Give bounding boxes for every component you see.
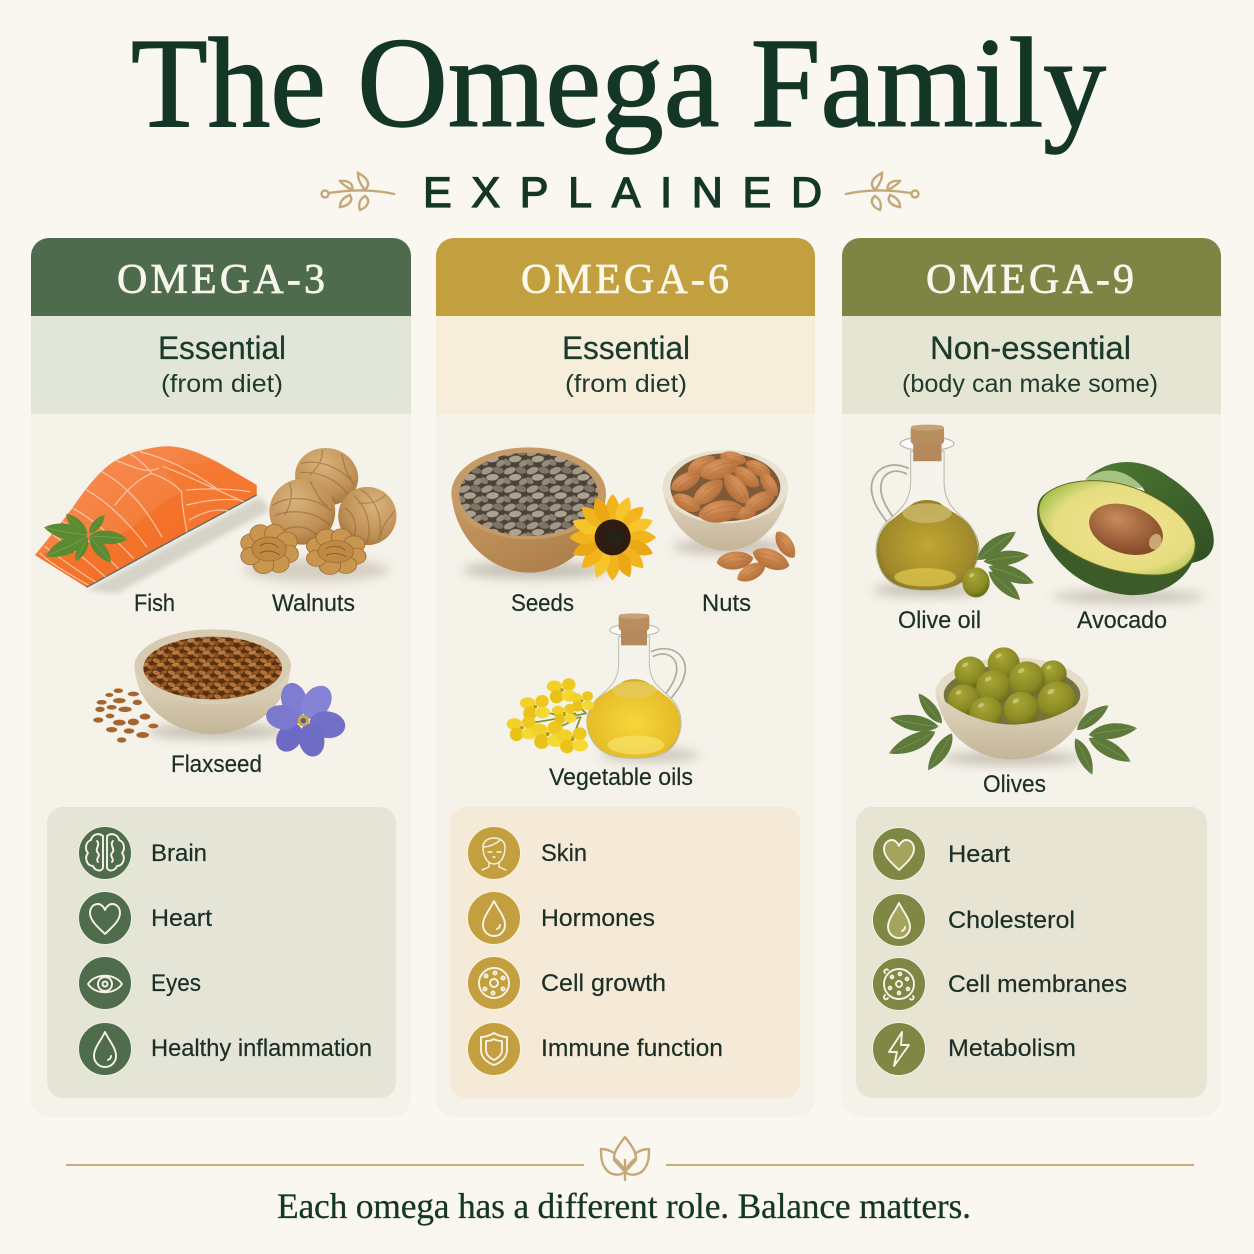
almonds in bowl [668, 449, 782, 525]
benefit: immune function [468, 1022, 723, 1076]
benefit: hormones [468, 892, 655, 944]
label: olive oil: Olive oil [898, 607, 981, 634]
essential band: Essential [158, 330, 286, 366]
fish: salmon fillet [35, 446, 270, 593]
non-essential band: (body can make some) [902, 370, 1158, 398]
benefit: immune function: Immune function [541, 1035, 723, 1062]
sunflower [569, 494, 656, 581]
benefit: healthy inflammation [78, 1022, 372, 1076]
omega-6 header [436, 238, 815, 316]
label: fish: Fish [134, 590, 175, 617]
panel: omega-9 [842, 238, 1221, 1117]
benefit: skin [468, 826, 587, 880]
label: olives: Olives [983, 771, 1046, 798]
non-essential band [842, 316, 1221, 414]
icon: footer leaf [601, 1137, 649, 1180]
omega-3 heading: OMEGA-3 [117, 257, 325, 303]
footer message: Each omega has a different role. Balance matters. [277, 1186, 971, 1226]
food illustrations: omega-9 [871, 425, 1214, 777]
benefit: heart: Heart [151, 905, 212, 932]
omega-3 header [31, 238, 411, 316]
essential band: Essential [562, 330, 690, 366]
benefits box: omega-6 [450, 807, 800, 1098]
omega-6 heading: OMEGA-6 [521, 257, 729, 303]
benefit: cholesterol: Cholesterol [948, 907, 1075, 934]
benefit: cell membranes [872, 958, 1127, 1010]
avocado [1037, 462, 1214, 603]
benefits box: omega-3 [47, 807, 396, 1098]
benefit: cell growth: Cell growth [541, 970, 666, 997]
essential band [31, 316, 411, 414]
benefits box: omega-9 [856, 807, 1207, 1098]
benefit: metabolism: Metabolism [948, 1035, 1076, 1062]
scattered flax seeds [93, 688, 158, 743]
panel: omega-3 [31, 238, 411, 1117]
benefit: cholesterol [872, 894, 1075, 946]
benefit: cell membranes: Cell membranes [948, 971, 1127, 998]
flax flower [264, 680, 347, 759]
benefit: healthy inflammation: Healthy inflammation [151, 1035, 372, 1062]
vegetable oil bottle [586, 613, 699, 762]
label: nuts: Nuts [702, 590, 751, 617]
benefit: eyes [78, 956, 201, 1010]
benefit: heart [78, 892, 212, 944]
omega-9 header [842, 238, 1221, 316]
herb garnish [42, 510, 128, 566]
olive sprig [962, 525, 1037, 605]
olive oil bottle [871, 425, 1037, 605]
nuts bowl [663, 449, 800, 586]
benefit: skin: Skin [541, 840, 587, 867]
loose almonds [716, 528, 800, 586]
seeds bowl [451, 447, 609, 579]
footer divider [66, 1137, 1194, 1180]
benefit: heart: Heart [948, 841, 1010, 868]
benefit: brain [78, 826, 207, 880]
food illustrations: omega-6 [451, 447, 800, 762]
subtitle: explained: EXPLAINED [423, 169, 822, 217]
rapeseed flowers [507, 678, 594, 753]
food illustrations: omega-3 [35, 442, 407, 759]
subtitle with laurels [322, 169, 918, 217]
benefit: hormones: Hormones [541, 905, 655, 932]
label: seeds: Seeds [511, 590, 574, 617]
walnuts [241, 442, 407, 582]
essential band: (from diet) [161, 370, 283, 398]
flaxseed bowl [134, 629, 291, 739]
benefit: cell growth [468, 956, 666, 1010]
benefit: metabolism [872, 1022, 1076, 1076]
omega-9 heading: OMEGA-9 [926, 257, 1134, 303]
label: flaxseed: Flaxseed [171, 751, 262, 778]
icon: right laurel [846, 173, 918, 210]
benefit: brain: Brain [151, 840, 207, 867]
essential band: (from diet) [565, 370, 687, 398]
title: The Omega Family [131, 12, 1106, 154]
label: avocado: Avocado [1077, 607, 1167, 634]
label: vegetable oils: Vegetable oils [549, 764, 693, 791]
avocado pit [1082, 495, 1170, 564]
olives bowl [886, 647, 1138, 777]
icon: left laurel [322, 173, 394, 210]
benefit: heart [872, 828, 1010, 880]
benefit: eyes: Eyes [151, 970, 201, 997]
essential band [436, 316, 815, 414]
label: walnuts: Walnuts [272, 590, 355, 617]
non-essential band: Non-essential [930, 330, 1131, 366]
panel: omega-6 [436, 238, 815, 1117]
